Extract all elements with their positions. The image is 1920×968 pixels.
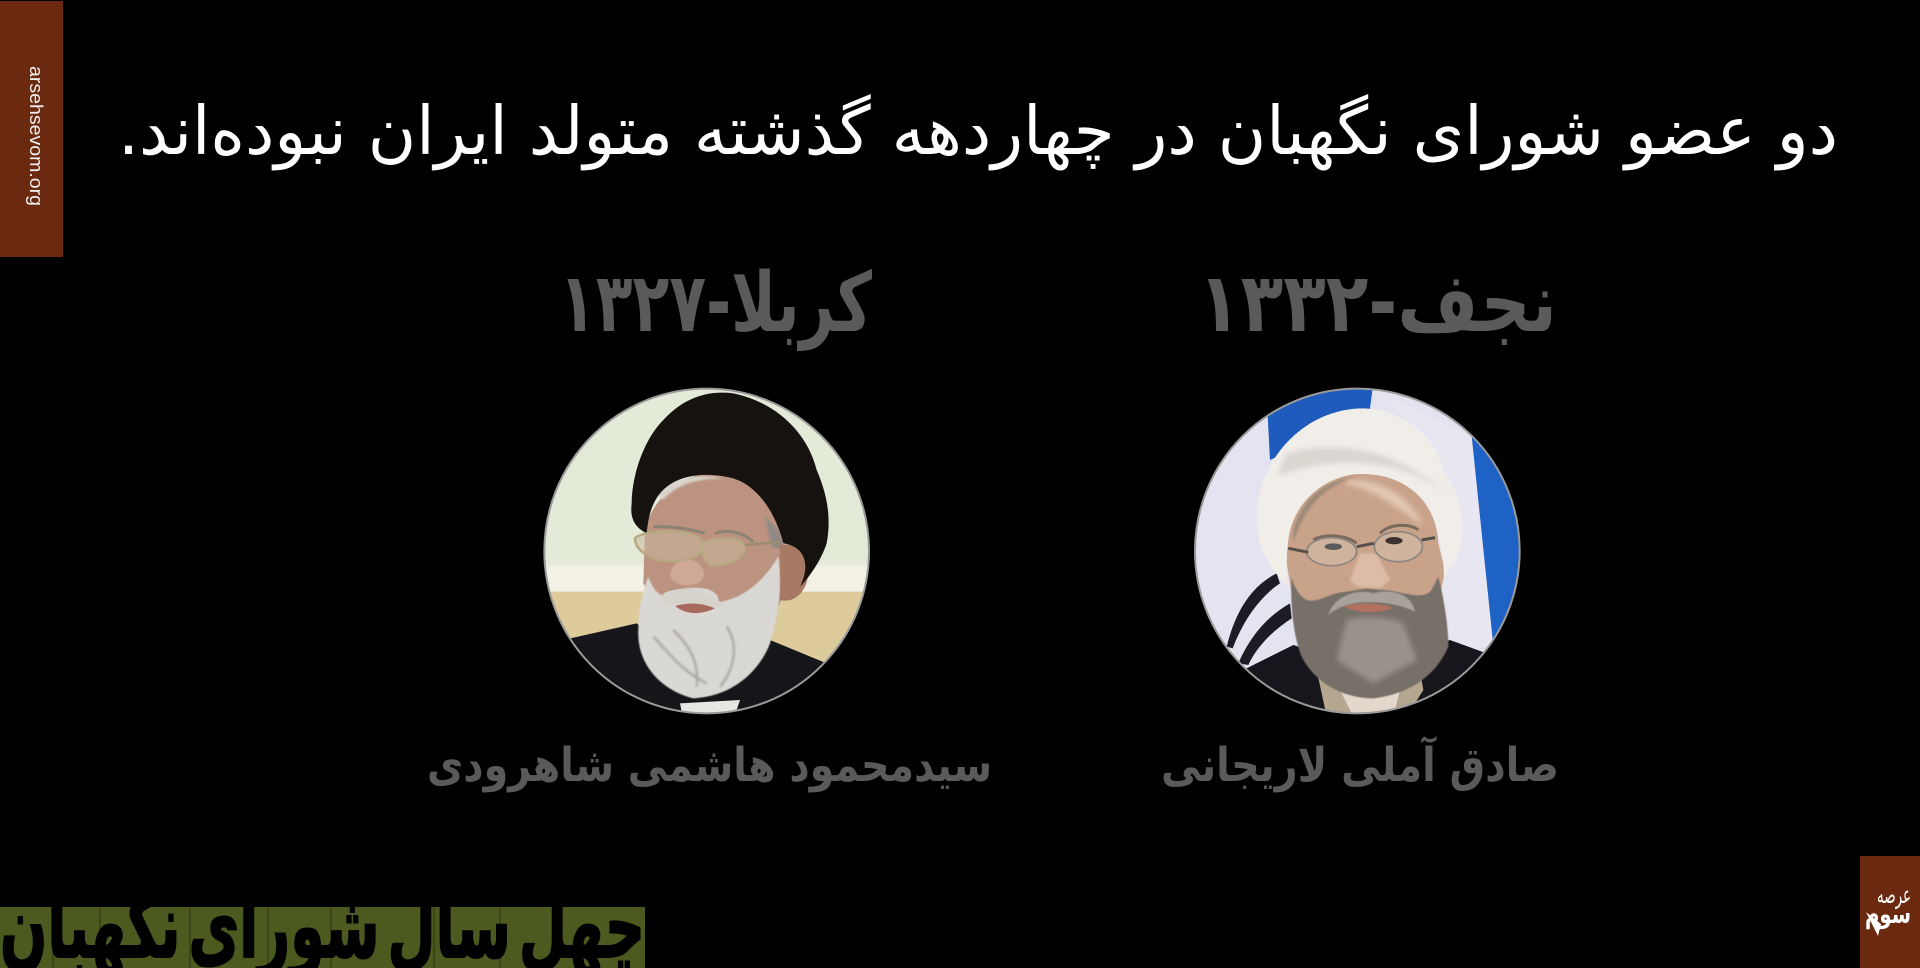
heading: birthplace and year, Shahroudi: کربلا-۱۳۲۷ <box>559 256 872 351</box>
side tab: website <box>0 1 63 257</box>
heading: birthplace and year, Larijani: نجف-۱۳۳۲ <box>1198 256 1557 351</box>
side tab: website: arsehsevom.org <box>26 66 47 206</box>
name: Shahroudi: سیدمحمود هاشمی شاهرودی <box>427 738 992 793</box>
name: Larijani: صادق آملی لاریجانی <box>1161 735 1559 793</box>
portrait: Mahmoud Hashemi Shahroudi <box>540 383 877 723</box>
logo tab <box>1860 856 1920 968</box>
portrait: Sadegh Amoli Larijani <box>1190 383 1527 723</box>
banner: series title <box>0 907 645 968</box>
title: دو عضو شورای نگهبان در چهاردهه گذشته متولد ایران نبوده‌اند. <box>118 92 1838 171</box>
